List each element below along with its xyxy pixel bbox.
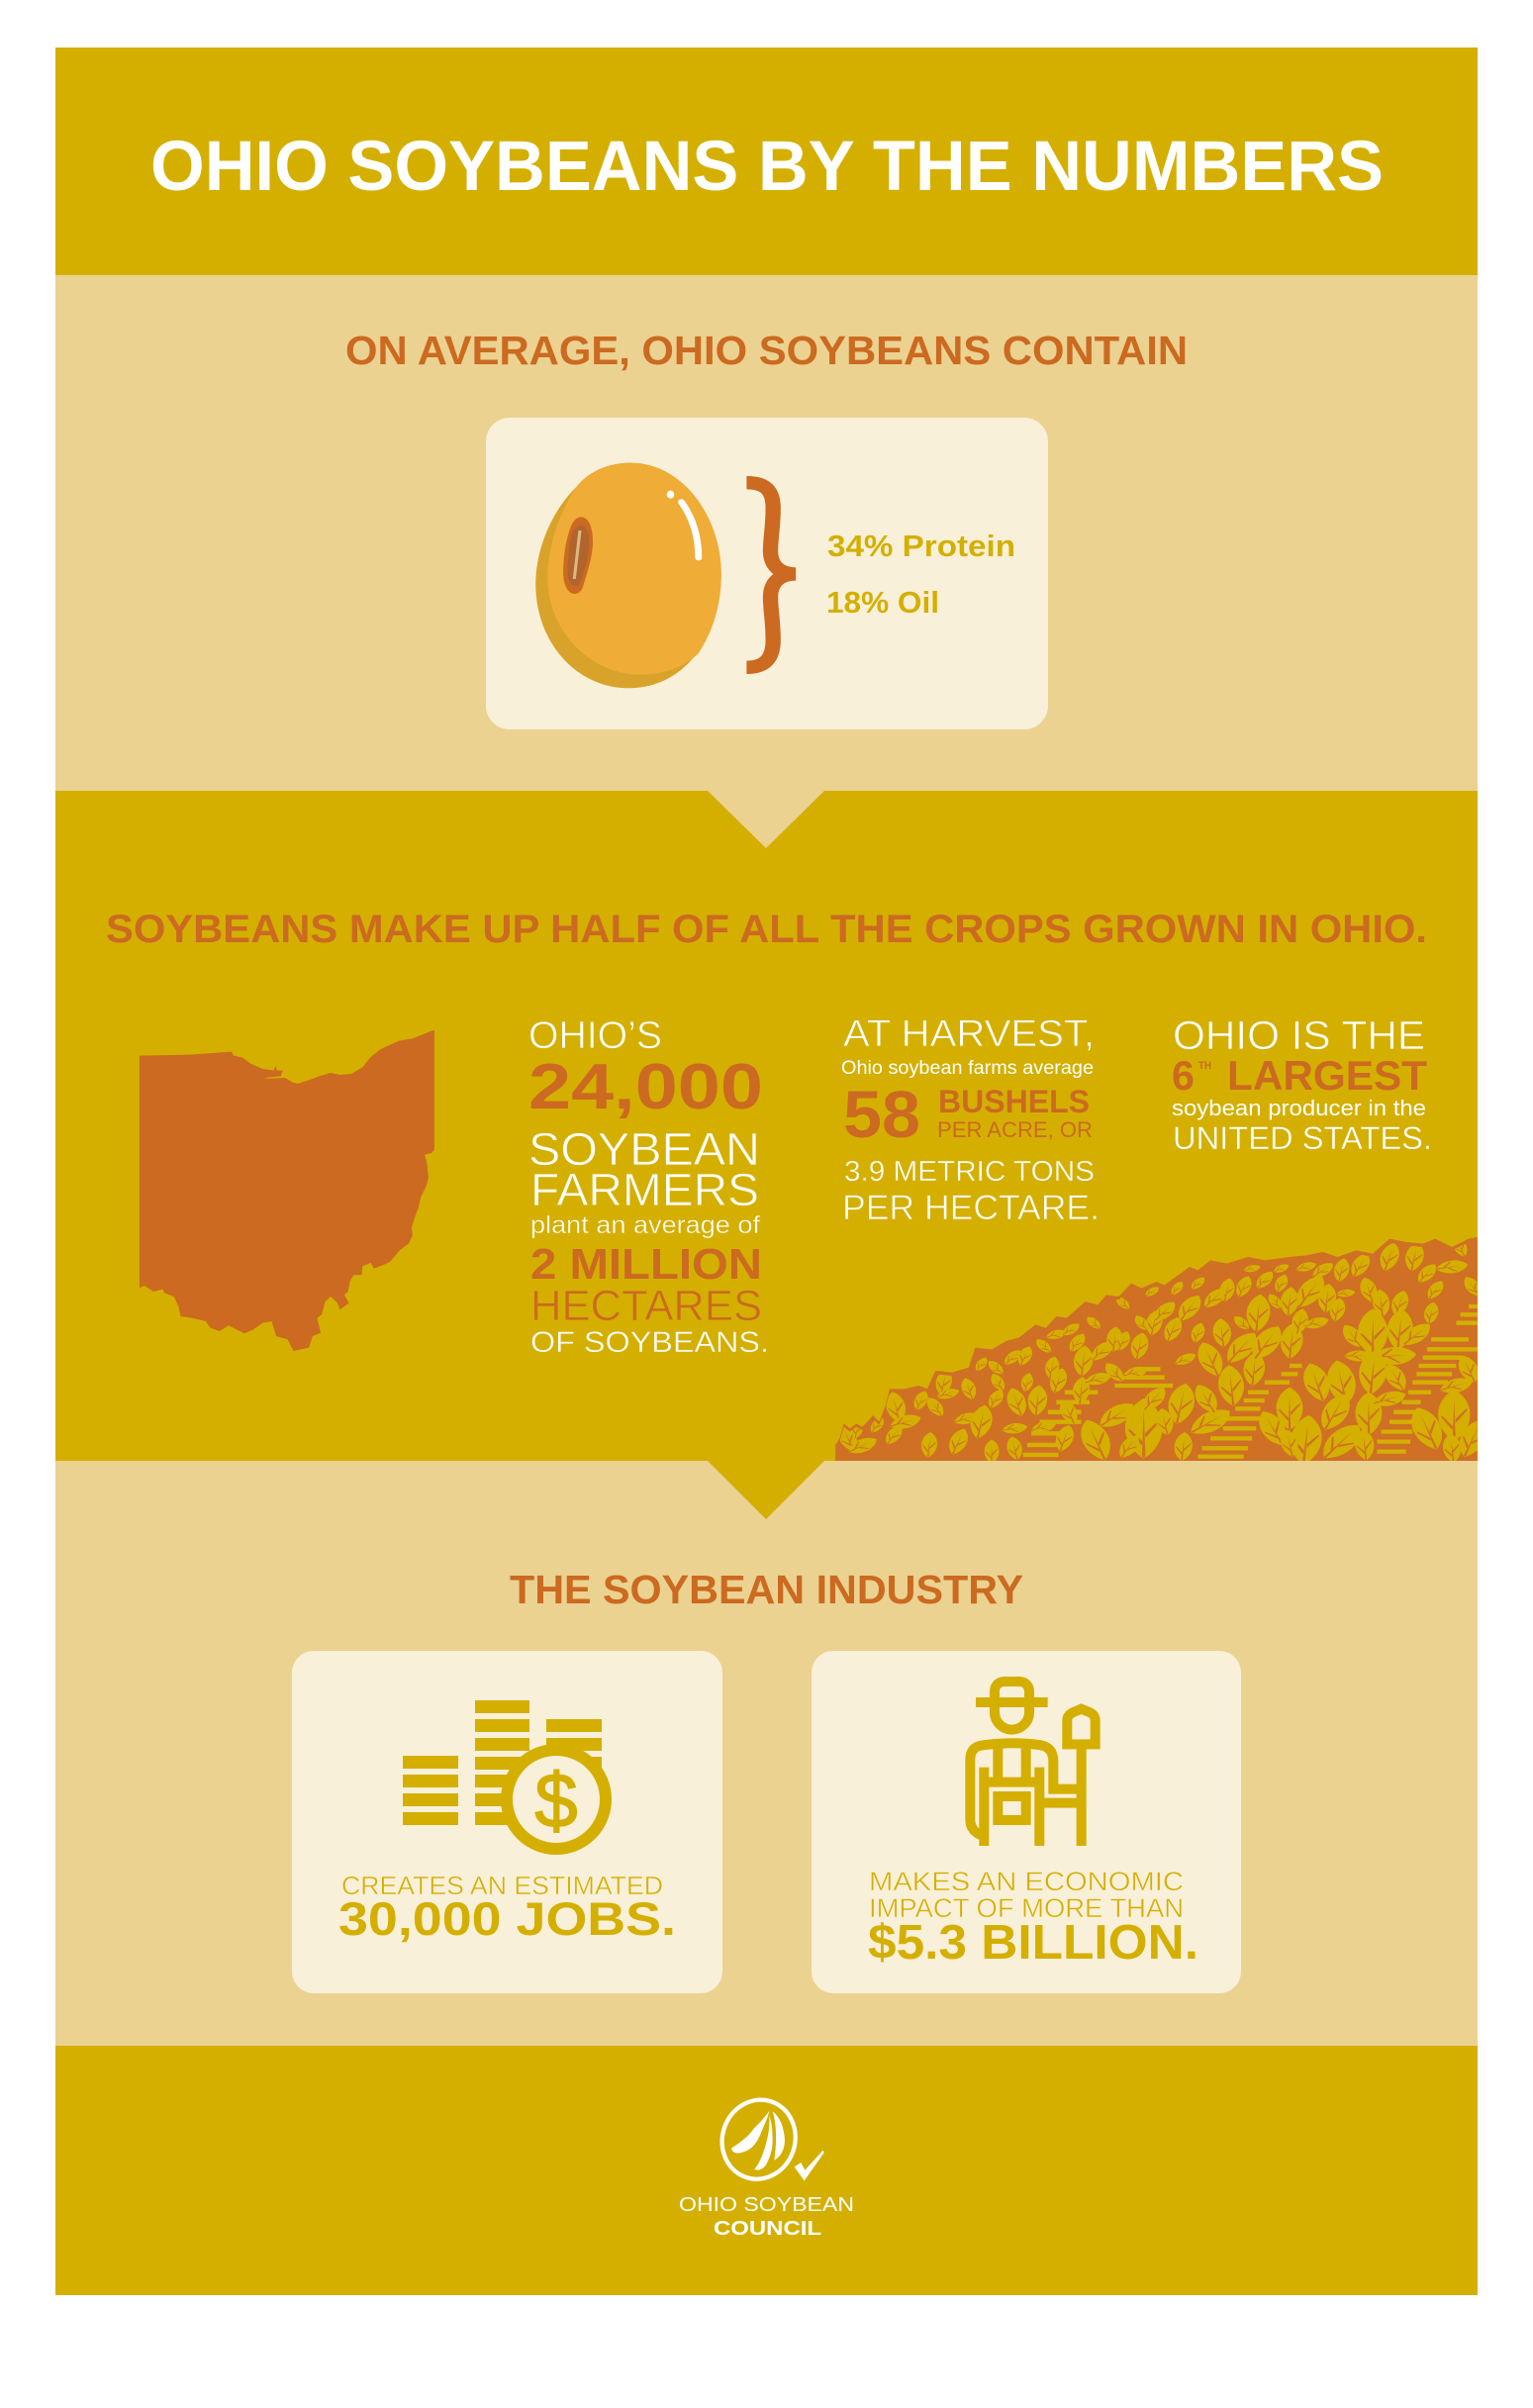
- text: oil share: 18% Oil: [826, 585, 939, 620]
- text: council name second line: COUNCIL: [714, 2218, 821, 2240]
- icon: brace: [746, 483, 796, 667]
- stat: harvest yield: BUSHELS: [938, 1084, 1090, 1119]
- stat: national rank: TH: [1198, 1060, 1211, 1072]
- arrow: mustard pointer: [708, 1461, 824, 1519]
- card: economic impact: [812, 1651, 1241, 1993]
- heading: industry: THE SOYBEAN INDUSTRY: [510, 1567, 1023, 1612]
- stat: farmers and hectares: 2 MILLION: [530, 1240, 762, 1289]
- heading: crops: SOYBEANS MAKE UP HALF OF ALL THE CROPS GROWN IN OHIO.: [106, 908, 1427, 951]
- stat: farmers and hectares: SOYBEAN: [528, 1123, 760, 1175]
- logo: Ohio Soybean Council: [679, 2090, 854, 2240]
- panel: composition: [55, 275, 1478, 791]
- icon: soybean pods and check: [712, 2090, 824, 2188]
- icon: coin stacks: [403, 1700, 606, 1849]
- stat: farmers and hectares: FARMERS: [530, 1164, 759, 1215]
- text: jobs lead-in: CREATES AN ESTIMATED: [341, 1871, 663, 1900]
- stat: harvest yield: PER HECTARE.: [842, 1189, 1100, 1227]
- stat: national rank: [1172, 1012, 1432, 1156]
- heading: composition: ON AVERAGE, OHIO SOYBEANS CONTAIN: [345, 328, 1188, 373]
- stat: harvest yield: [841, 1013, 1100, 1227]
- icon: soybean: [535, 463, 721, 688]
- panel: crops: [55, 791, 1492, 1466]
- stat: farmers and hectares: OHIO’S: [528, 1014, 662, 1057]
- stat: harvest yield: PER ACRE, OR: [937, 1117, 1093, 1142]
- stat: harvest yield: 3.9 METRIC TONS: [844, 1156, 1095, 1188]
- stat: farmers and hectares: OF SOYBEANS.: [530, 1326, 769, 1359]
- text: council name: OHIO SOYBEAN: [679, 2194, 854, 2216]
- stat: harvest yield: AT HARVEST,: [843, 1013, 1095, 1055]
- stat: harvest yield: Ohio soybean farms average: [841, 1058, 1094, 1079]
- stat: national rank: soybean producer in the: [1172, 1096, 1426, 1120]
- stat: national rank: 6: [1172, 1052, 1195, 1099]
- panel: footer: [55, 2046, 1478, 2295]
- panel: industry: [55, 1461, 1478, 2046]
- card: bean composition: [486, 418, 1048, 729]
- stat: farmers and hectares: plant an average of: [530, 1211, 760, 1239]
- stat: national rank: LARGEST: [1227, 1052, 1427, 1099]
- title: OHIO SOYBEANS BY THE NUMBERS: [150, 128, 1384, 206]
- map: Ohio: [140, 1030, 434, 1351]
- stat: farmers and hectares: HECTARES: [530, 1282, 762, 1330]
- illustration: soybean field: [834, 1235, 1492, 1466]
- stat: harvest yield: 58: [843, 1078, 920, 1152]
- text: impact figure: $5.3 BILLION.: [868, 1916, 1198, 1970]
- text: jobs figure: 30,000 JOBS.: [338, 1892, 676, 1945]
- text: protein share: 34% Protein: [827, 529, 1015, 563]
- icon: farmer with shovel: [970, 1682, 1096, 1846]
- stat: farmers and hectares: [528, 1014, 769, 1359]
- arrow: tan pointer: [708, 791, 824, 848]
- stat: national rank: OHIO IS THE: [1173, 1012, 1425, 1058]
- stat: national rank: UNITED STATES.: [1173, 1120, 1432, 1156]
- stat: farmers and hectares: 24,000: [528, 1050, 763, 1122]
- card: jobs: [292, 1651, 722, 1993]
- panel: header band: [55, 48, 1478, 275]
- text: impact lead-in second line: IMPACT OF MORE THAN: [869, 1893, 1184, 1923]
- text: impact lead-in: MAKES AN ECONOMIC: [869, 1867, 1184, 1896]
- icon: coin stacks: $: [534, 1757, 578, 1844]
